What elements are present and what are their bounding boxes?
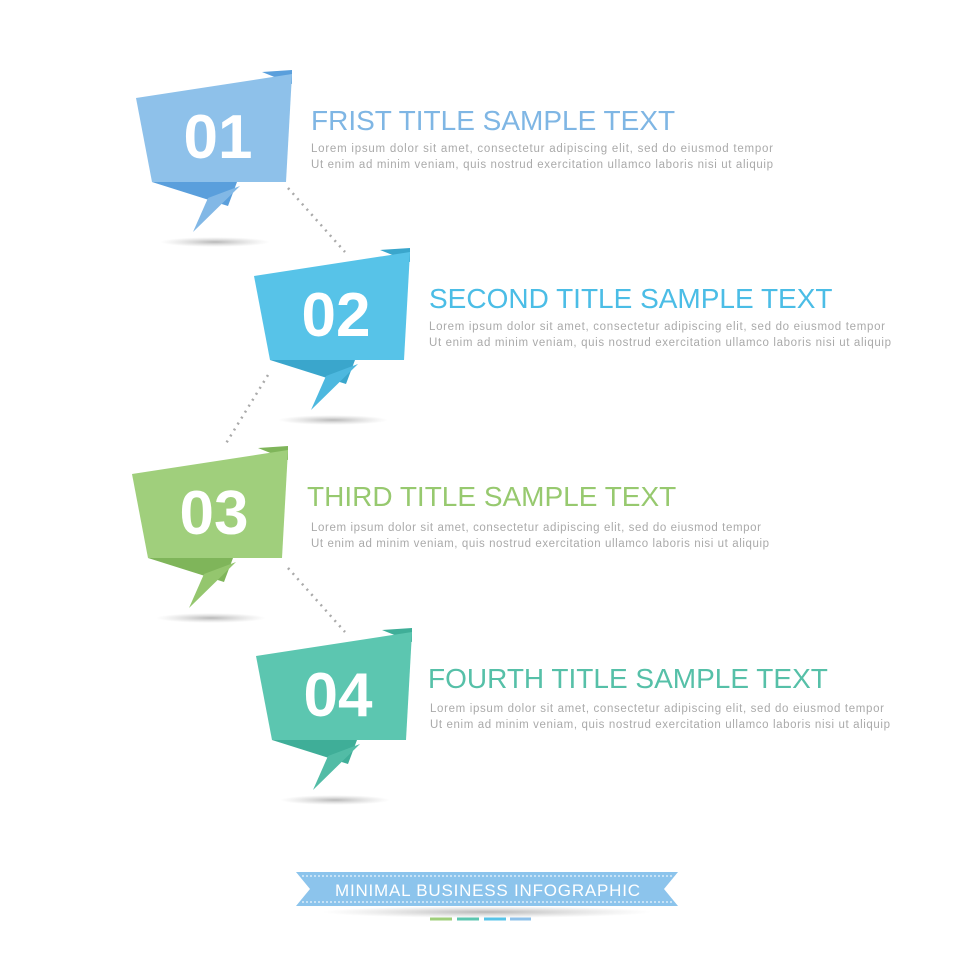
badge 01: 01 — [184, 103, 252, 172]
badge 04: 04 — [304, 661, 373, 730]
ribbon banner — [296, 872, 678, 918]
step 1 — [136, 70, 773, 247]
color dashes — [430, 918, 531, 920]
text 2 — [429, 283, 891, 349]
connector dotted lines — [225, 188, 345, 632]
badge 01 — [136, 70, 292, 232]
badge 02: 02 — [302, 281, 370, 350]
text 3: THIRD TITLE SAMPLE TEXT — [307, 481, 676, 512]
text 1: FRIST TITLE SAMPLE TEXT — [311, 105, 675, 136]
step 3 — [132, 446, 769, 623]
step 4 — [256, 628, 890, 805]
badge 03 — [132, 446, 288, 608]
text 1 — [311, 105, 773, 171]
text 4: FOURTH TITLE SAMPLE TEXT — [428, 663, 828, 694]
step 2 — [254, 248, 891, 425]
badge 02 — [254, 248, 410, 410]
text 1: Lorem ipsum dolor sit amet, consectetur adipiscing elit, sed do eiusmod tempor — [311, 143, 773, 155]
text 4 — [428, 663, 890, 731]
text 3: Ut enim ad minim veniam, quis nostrud exercitation ullamco laboris nisi ut aliquip — [311, 538, 769, 550]
text 2: SECOND TITLE SAMPLE TEXT — [429, 283, 833, 314]
ribbon banner: MINIMAL BUSINESS INFOGRAPHIC — [335, 881, 640, 900]
text 1: Ut enim ad minim veniam, quis nostrud exercitation ullamco laboris nisi ut aliquip — [311, 159, 773, 171]
text 3 — [307, 481, 769, 550]
text 4: Ut enim ad minim veniam, quis nostrud exercitation ullamco laboris nisi ut aliquip — [430, 719, 890, 731]
text 2: Ut enim ad minim veniam, quis nostrud exercitation ullamco laboris nisi ut aliquip — [429, 337, 891, 349]
text 3: Lorem ipsum dolor sit amet, consectetur adipiscing elit, sed do eiusmod tempor — [311, 522, 761, 534]
badge 04 — [256, 628, 412, 790]
badge 03: 03 — [180, 479, 248, 548]
text 4: Lorem ipsum dolor sit amet, consectetur adipiscing elit, sed do eiusmod tempor — [430, 703, 884, 715]
text 2: Lorem ipsum dolor sit amet, consectetur adipiscing elit, sed do eiusmod tempor — [429, 321, 885, 333]
